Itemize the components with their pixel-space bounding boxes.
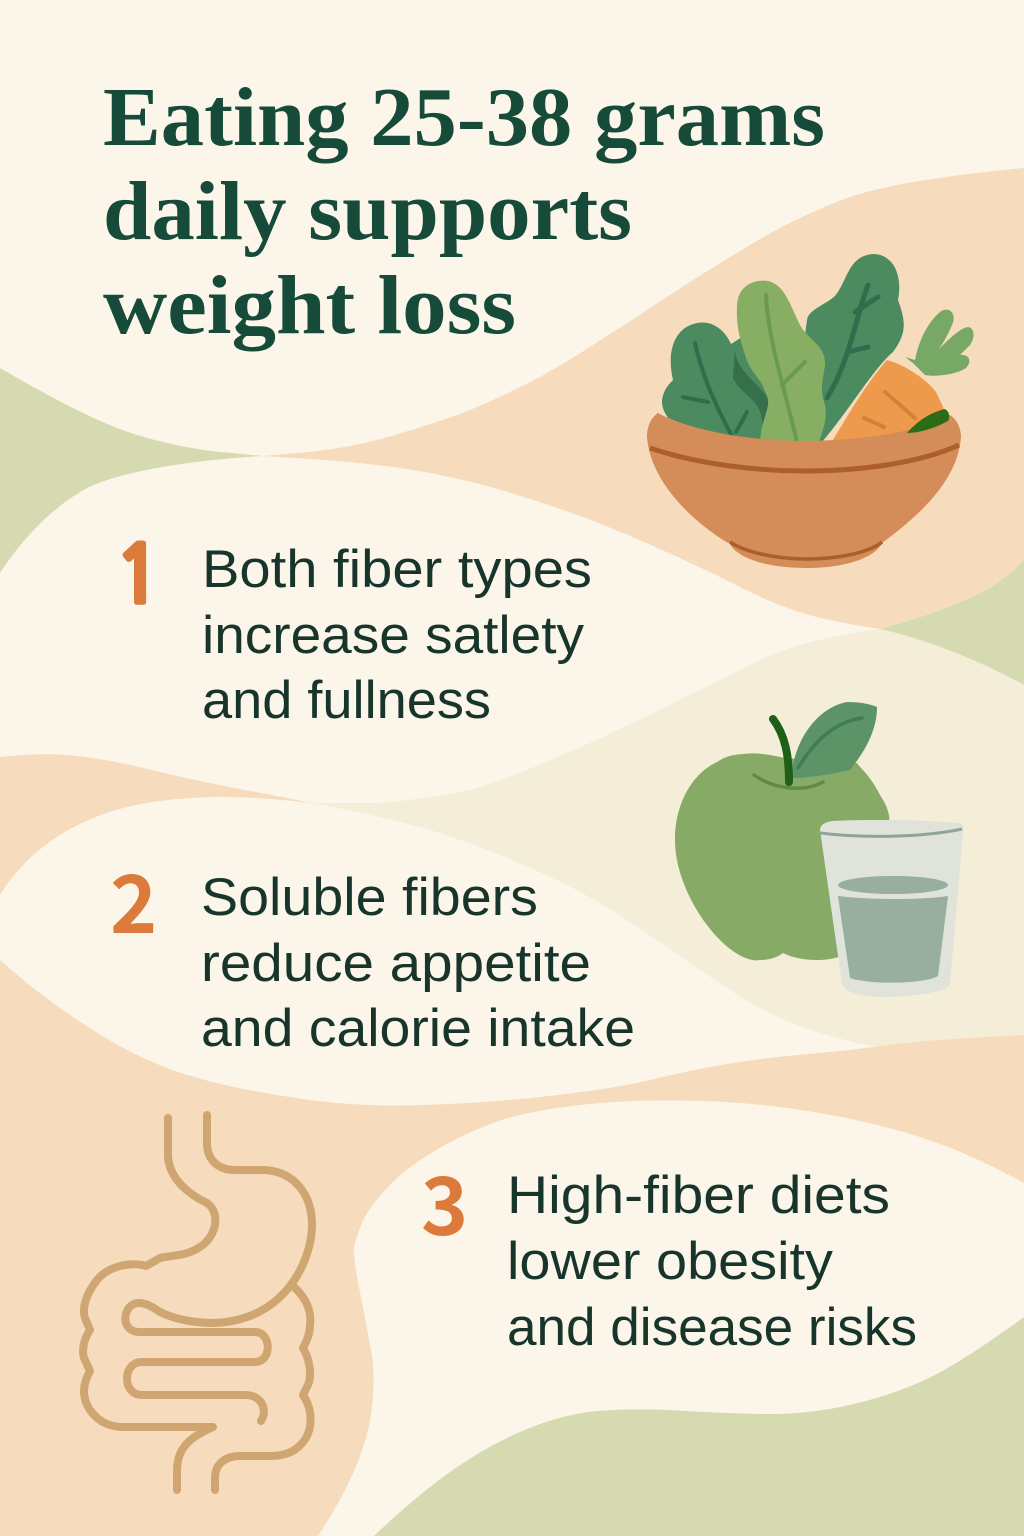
item 1: increase satlety: [202, 606, 585, 665]
item 1: Both fiber types: [202, 540, 592, 599]
leaf: [792, 702, 877, 778]
icon: salad bowl: [647, 254, 974, 568]
glass: [820, 820, 963, 997]
title: weight loss: [103, 259, 516, 352]
background: right sage wedge: [880, 560, 1024, 685]
item 3: 3: [421, 1143, 468, 1259]
background: upper peach band: [263, 168, 1024, 629]
icon: apple and water glass: [675, 702, 963, 997]
background: peach band middle left: [0, 754, 312, 895]
item 2: Soluble fibers: [201, 868, 538, 927]
carrot greens: [905, 310, 974, 376]
leaf shadow: [733, 350, 770, 428]
apple body: [675, 753, 889, 960]
carrot: [830, 360, 950, 445]
background: pale cream right band: [312, 629, 1024, 1048]
item 1: [114, 536, 592, 730]
icon: digestive system: [83, 1115, 312, 1490]
water: [838, 876, 948, 894]
background: left sage wedge: [0, 368, 263, 573]
apple dimple: [754, 775, 823, 788]
stem: [773, 719, 789, 782]
title: [103, 71, 825, 352]
bowl foot: [728, 538, 883, 568]
item 1: 1: [114, 536, 162, 615]
item 3: lower obesity: [507, 1232, 834, 1291]
bowl body: [647, 413, 961, 548]
item 1: and fullness: [202, 671, 491, 730]
item 3: and disease risks: [507, 1298, 917, 1357]
item 2: [110, 841, 635, 1058]
item 3: [421, 1143, 917, 1357]
left dark leaf: [662, 322, 790, 448]
item 2: reduce appetite: [201, 934, 591, 993]
middle light leaf: [737, 281, 826, 448]
background: bottom sage corner: [374, 1317, 1024, 1536]
title: Eating 25-38 grams: [103, 71, 825, 164]
item 2: and calorie intake: [201, 999, 635, 1058]
title: daily supports: [103, 165, 632, 258]
background: lower peach area: [0, 960, 1024, 1536]
right dark leaf: [790, 254, 904, 448]
carrot leaf tip: [907, 409, 949, 433]
item 3: High-fiber diets: [507, 1166, 890, 1225]
item 2: 2: [110, 841, 157, 957]
